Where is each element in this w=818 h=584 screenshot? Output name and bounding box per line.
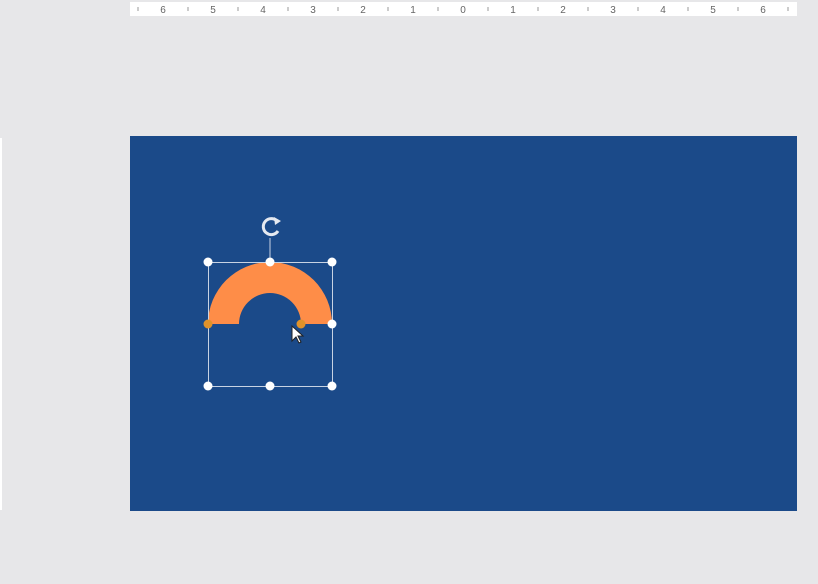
ruler: 1 bbox=[510, 5, 516, 16]
ruler: 5 bbox=[210, 5, 216, 16]
ruler bbox=[130, 2, 797, 16]
arc bbox=[208, 262, 332, 324]
selection box bbox=[204, 217, 336, 390]
ruler: 6 bbox=[760, 5, 766, 16]
ruler: 5 bbox=[710, 5, 716, 16]
ruler: 2 bbox=[560, 5, 566, 16]
ruler: 2 bbox=[360, 5, 366, 16]
ruler: 1 bbox=[410, 5, 416, 16]
slide bbox=[130, 136, 797, 511]
ruler: 0 bbox=[460, 5, 466, 16]
ruler: 3 bbox=[310, 5, 316, 16]
ruler: 4 bbox=[260, 5, 266, 16]
left ruler strip bbox=[0, 138, 2, 510]
ruler: 4 bbox=[660, 5, 666, 16]
ruler: 6 bbox=[160, 5, 166, 16]
cursor bbox=[292, 326, 303, 343]
ruler: 3 bbox=[610, 5, 616, 16]
